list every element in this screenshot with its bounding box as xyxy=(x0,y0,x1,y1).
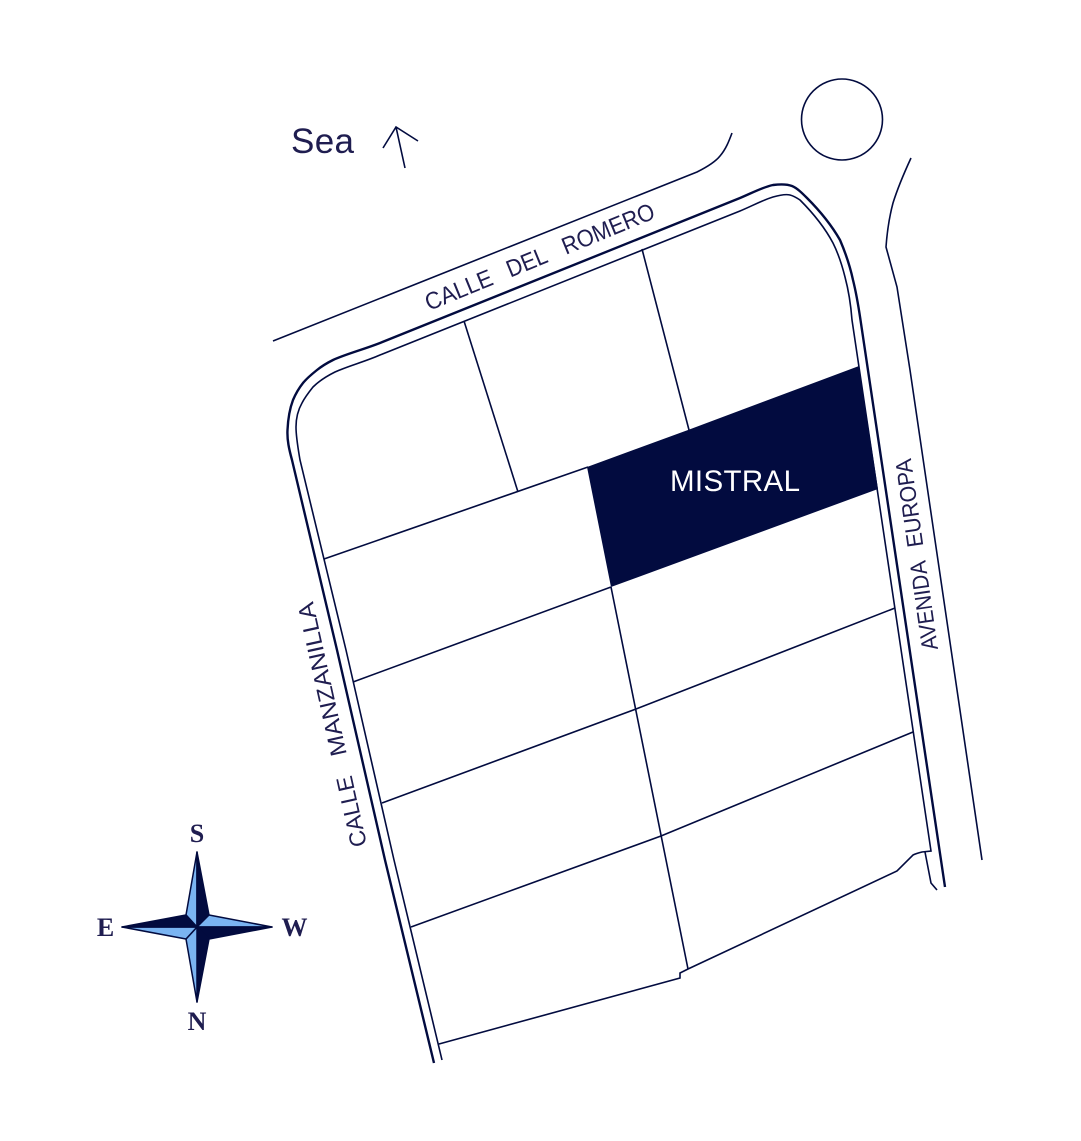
compass letters: N xyxy=(188,1007,207,1036)
roundabout xyxy=(802,79,882,160)
plot: Mistral xyxy=(587,366,878,587)
street label: Calle del Romero: ROMERO xyxy=(558,198,659,260)
sea label: Sea xyxy=(291,122,355,161)
street label: Avenida Europa xyxy=(890,457,943,652)
plot dividers xyxy=(324,249,913,969)
compass letters: E xyxy=(97,913,114,942)
compass letters xyxy=(97,819,308,1036)
compass letters: W xyxy=(282,913,308,942)
street label: Calle Manzanilla xyxy=(292,599,372,850)
street label: Avenida Europa: AVENIDA xyxy=(904,559,943,652)
street label: Calle del Romero: CALLE xyxy=(421,265,497,317)
street label: Calle Manzanilla: CALLE xyxy=(331,774,372,850)
compass star xyxy=(122,852,272,1002)
street label: Calle Manzanilla: MANZANILLA xyxy=(292,599,352,759)
block outer boundary xyxy=(287,184,945,1063)
compass letters: S xyxy=(190,819,204,848)
road edge: north xyxy=(273,133,732,341)
plot label: MISTRAL xyxy=(670,465,800,498)
street label: Calle del Romero xyxy=(421,198,659,317)
compass rose xyxy=(97,819,308,1036)
arrow: towards sea xyxy=(383,127,418,168)
block inner boundary xyxy=(296,195,931,1060)
street label: Avenida Europa: EUROPA xyxy=(890,457,928,549)
road edge: east xyxy=(886,158,982,860)
block corner tail xyxy=(925,852,937,890)
street label: Calle del Romero: DEL xyxy=(502,242,552,283)
